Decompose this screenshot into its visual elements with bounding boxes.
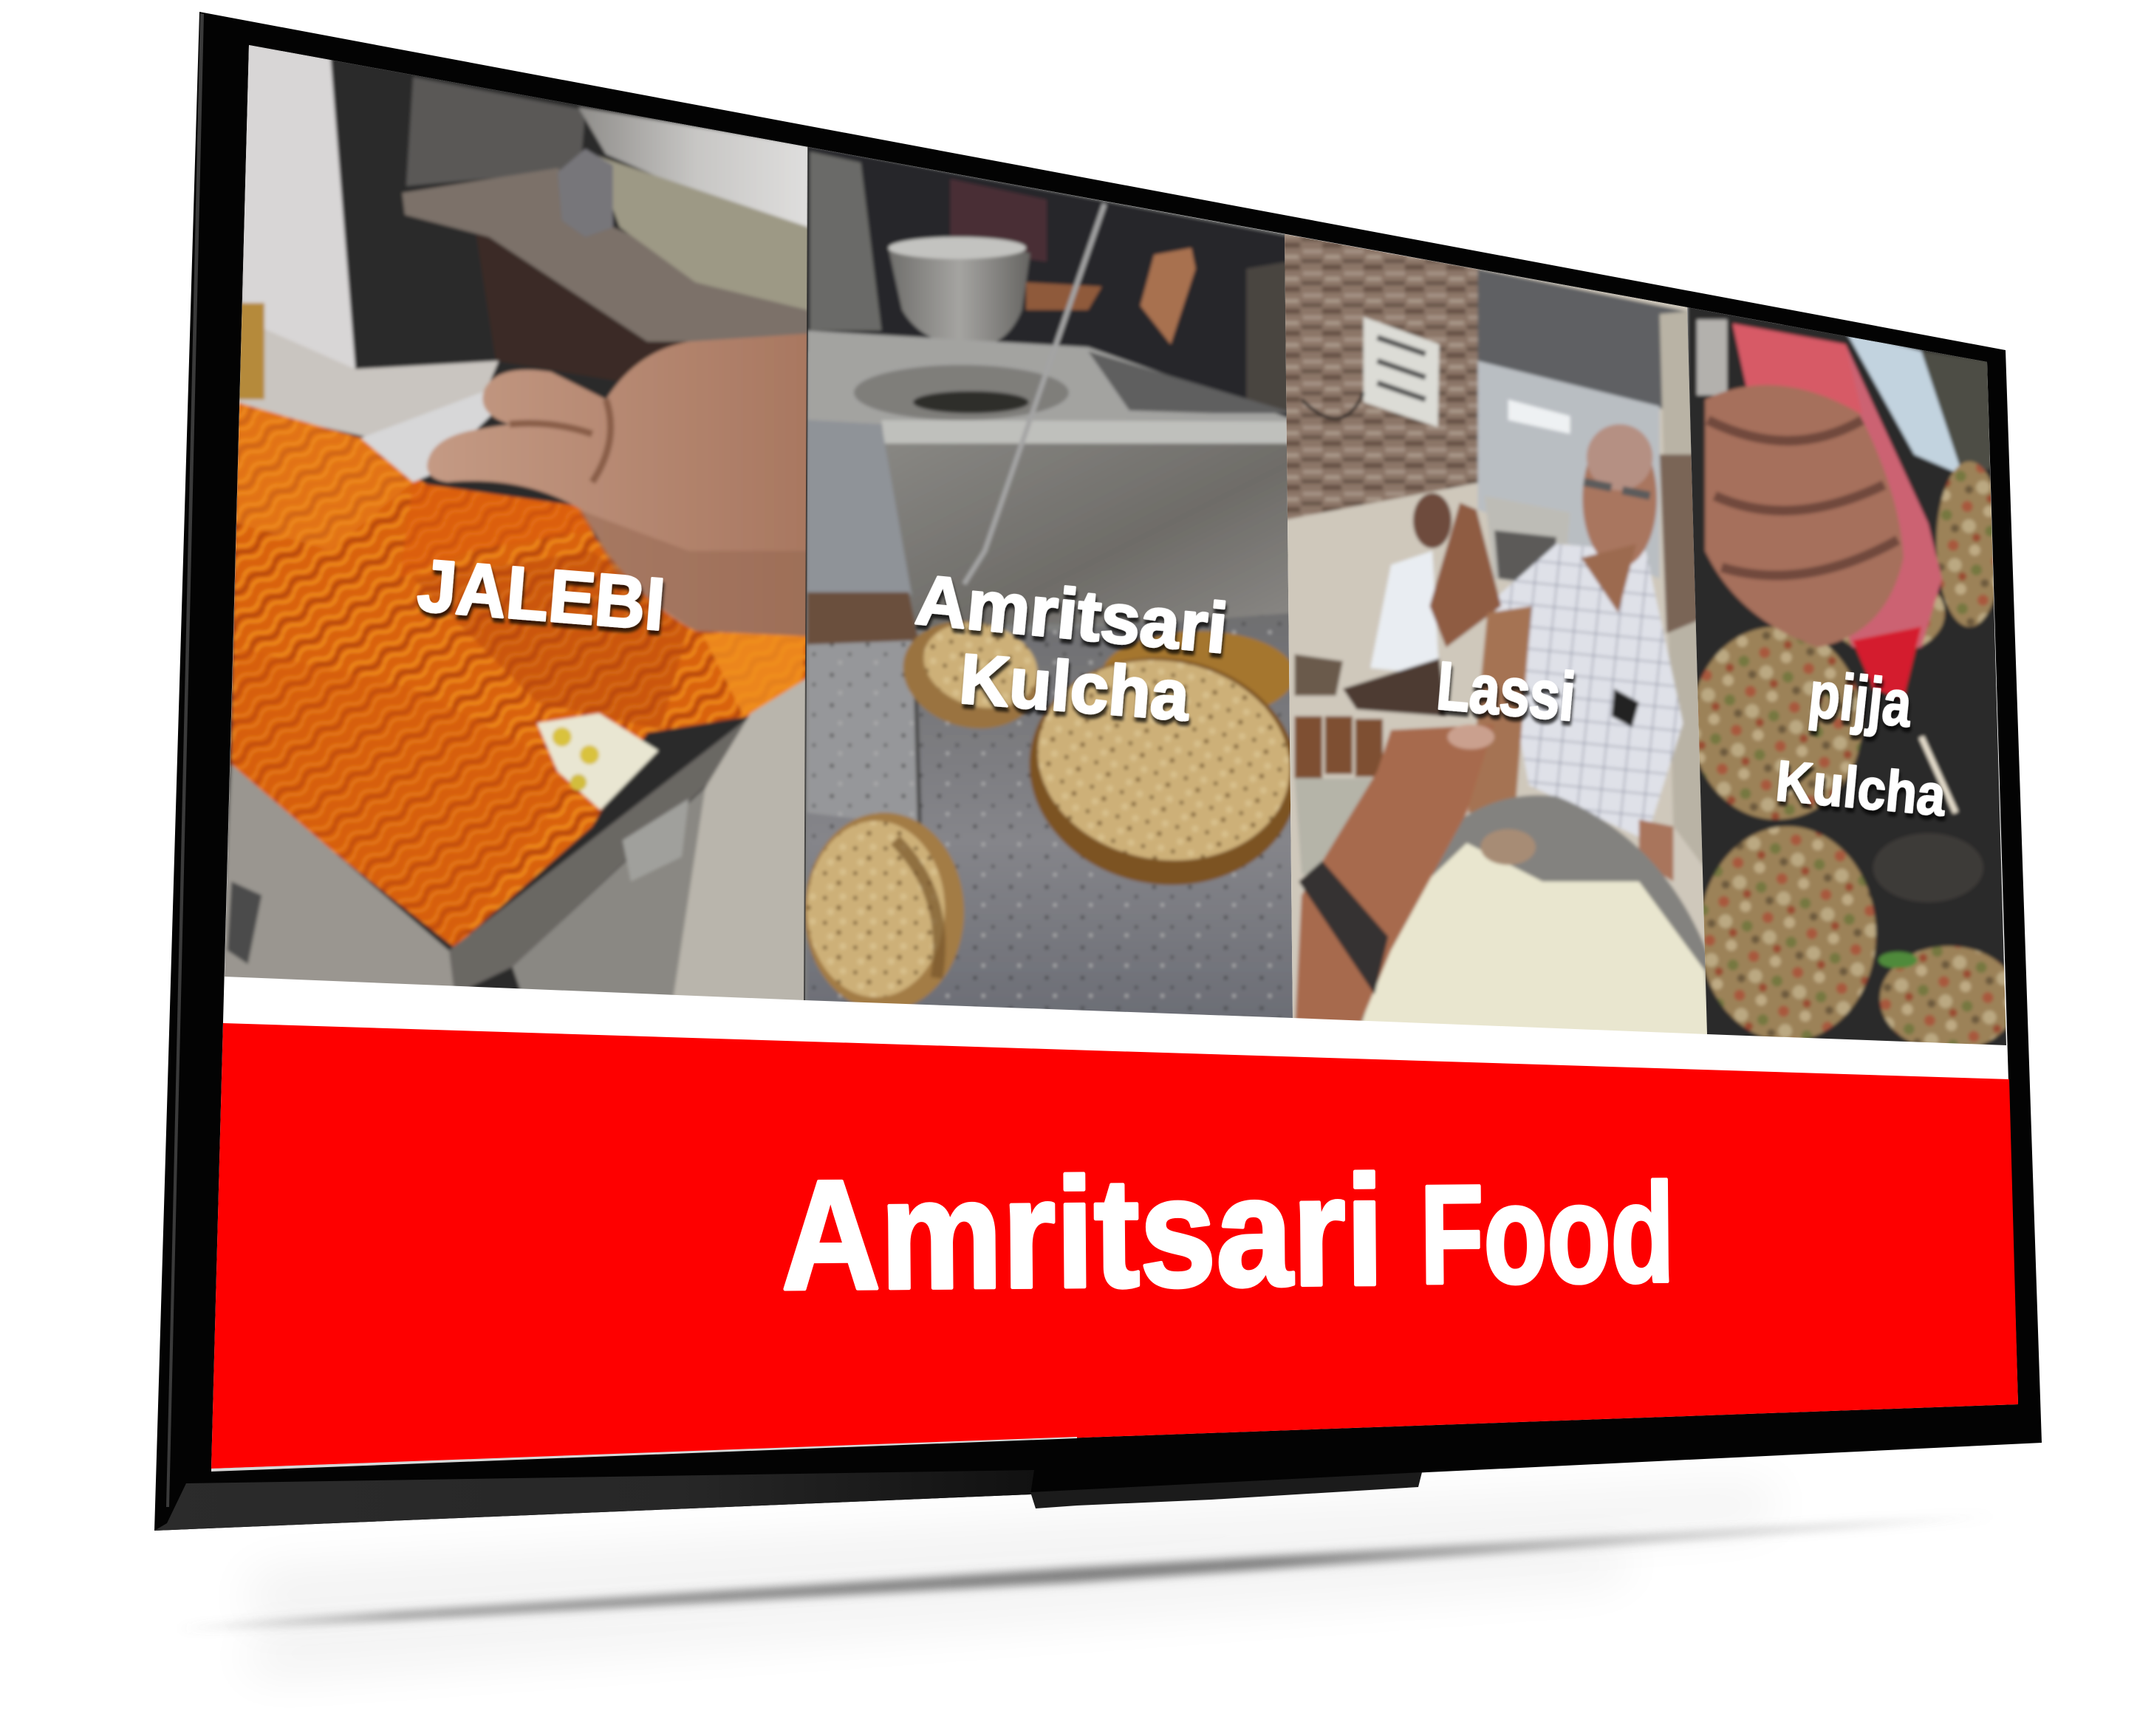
jalebi mass bbox=[231, 402, 810, 948]
lassi glass and raised hand bbox=[1429, 503, 1501, 647]
pizza kulchas bbox=[1936, 462, 2003, 626]
tray sides bbox=[220, 765, 454, 994]
panel: Amritsari Kulcha photo bbox=[799, 137, 1316, 1033]
label: Lassi: Lassi bbox=[1434, 648, 1578, 735]
bezel lower lip bbox=[154, 1470, 1034, 1531]
clay cups bbox=[1295, 717, 1383, 778]
wristwatch bbox=[1299, 861, 1388, 994]
TV set bbox=[154, 12, 2042, 1531]
arm and hand bbox=[1295, 725, 1494, 1033]
label: Amritsari: Amritsari bbox=[912, 560, 1231, 669]
label: Kulcha second: Kulcha bbox=[1773, 748, 1949, 828]
tandoor counter bbox=[807, 330, 1295, 448]
title: Food bbox=[1420, 1155, 1675, 1313]
label: JALEBI: JALEBI bbox=[414, 544, 668, 646]
upper wall bbox=[406, 77, 585, 186]
cook's hands bbox=[1141, 248, 1195, 344]
air cooler bbox=[1485, 496, 1570, 592]
bottom screen glint bbox=[211, 1437, 1077, 1472]
column divider line bbox=[804, 147, 808, 1000]
center stand bump bbox=[1030, 1472, 1422, 1508]
title: Amritsari bbox=[780, 1144, 1384, 1322]
hand bbox=[1705, 385, 1904, 647]
sauce bottle bbox=[1733, 324, 1942, 647]
bowl of lassi bbox=[1357, 795, 1716, 1047]
floor shadow below the TV bbox=[177, 1485, 1994, 1670]
label: pijja: pijja bbox=[1805, 657, 1915, 741]
iron rod bbox=[964, 204, 1104, 584]
floor and jar bbox=[239, 329, 501, 439]
sugar patch bbox=[537, 714, 658, 810]
bezel left highlight bbox=[166, 13, 204, 1507]
white pillar bbox=[241, 41, 355, 369]
pot bbox=[578, 107, 813, 231]
panel: Jalebi photo bbox=[207, 27, 827, 1019]
panel: Pizza Kulcha photo bbox=[1687, 303, 2017, 1053]
seated man bbox=[1494, 544, 1683, 840]
kulchas bbox=[891, 606, 1051, 743]
screen bbox=[211, 45, 2018, 1469]
griddle bbox=[807, 613, 1302, 1026]
metal tray corner bbox=[360, 392, 493, 482]
label: Kulcha: Kulcha bbox=[957, 639, 1192, 736]
panel: Lassi photo bbox=[1281, 228, 1722, 1053]
background man bbox=[1413, 493, 1452, 548]
red title band bbox=[211, 1023, 2018, 1469]
TV bezel bbox=[154, 12, 2042, 1531]
table bbox=[477, 236, 672, 381]
griddle sparkle bbox=[1873, 833, 1983, 902]
hand bbox=[427, 333, 813, 636]
steel panels bbox=[881, 420, 1295, 626]
green pepper bbox=[1878, 951, 1917, 968]
wall socket bbox=[1364, 317, 1439, 427]
steel bowl bbox=[886, 250, 1032, 343]
